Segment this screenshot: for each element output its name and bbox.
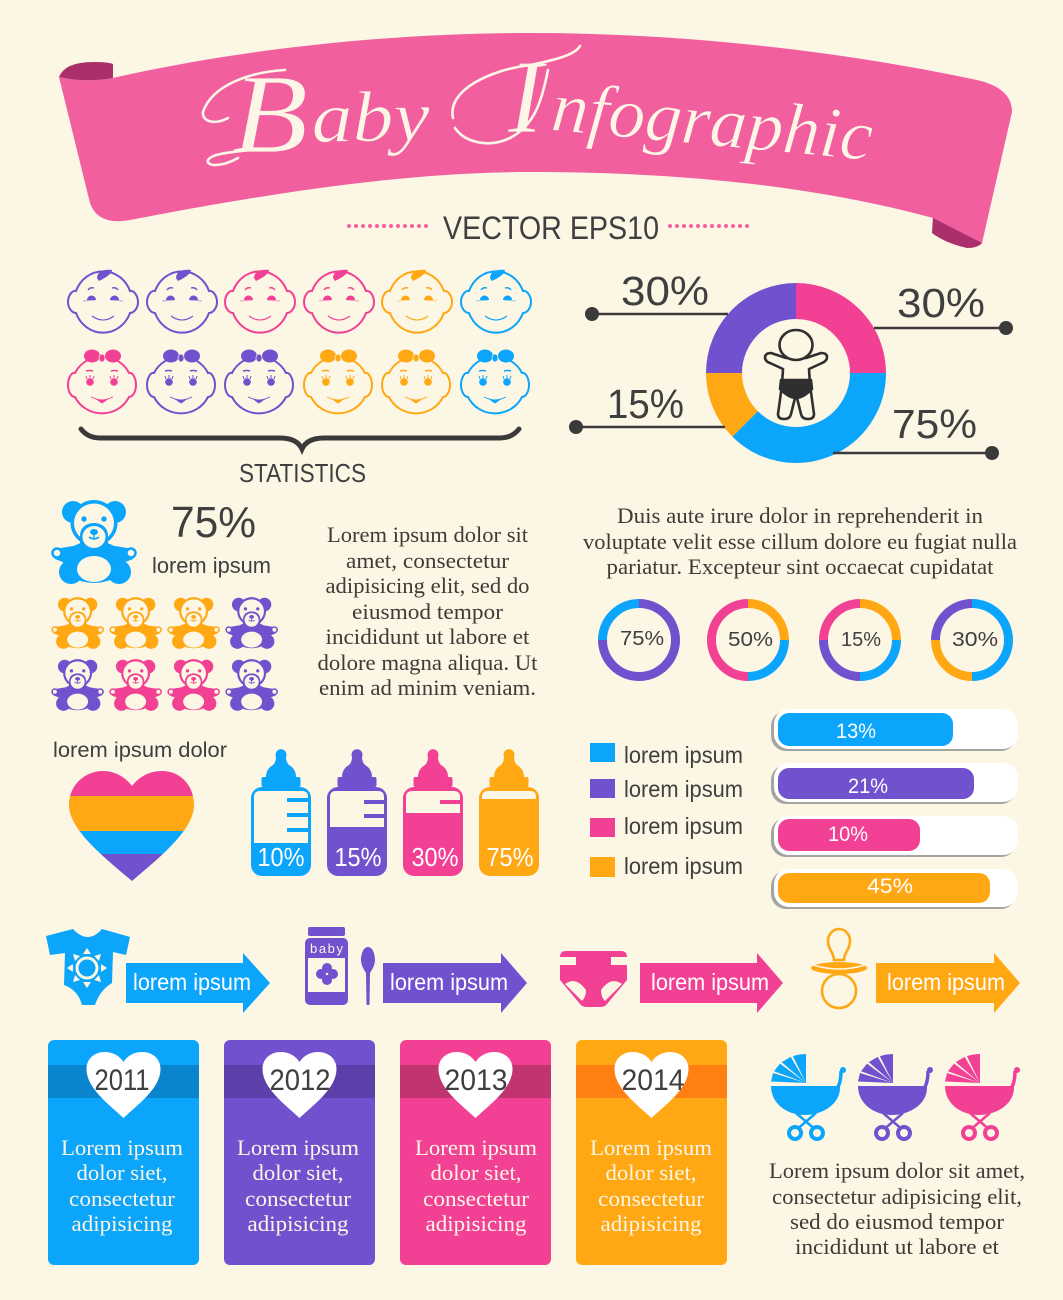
year card 2014: dolor siet, <box>606 1160 696 1185</box>
title ribbon <box>59 33 1012 248</box>
progress bar 10% <box>771 816 1018 857</box>
year card 2013: consectetur <box>423 1186 530 1211</box>
year card 2012 <box>224 1040 375 1265</box>
title text: nfographic <box>548 66 877 176</box>
progress bar 45% <box>771 869 1018 909</box>
progress bar 21% <box>771 763 1018 804</box>
legend: lorem ipsum <box>624 813 743 839</box>
arrow: orange <box>876 953 1020 1013</box>
year card 2012: 2012 <box>270 1064 330 1097</box>
year card 2012: Lorem ipsum <box>237 1135 359 1160</box>
ring chart 15% <box>824 604 896 676</box>
callout: 15% <box>569 381 725 434</box>
ring chart 50% <box>712 604 784 676</box>
year card 2013: Lorem ipsum <box>415 1135 537 1160</box>
ring chart 30% <box>936 604 1008 676</box>
year card 2011: adipisicing <box>72 1211 172 1236</box>
bottle 75% <box>479 749 539 876</box>
bottle 75%: 75% <box>486 842 534 872</box>
statistics label: STATISTICS <box>239 458 366 488</box>
year card 2014: consectetur <box>598 1186 705 1211</box>
callout: 15%: 15% <box>607 381 684 427</box>
icon: onesie <box>46 929 130 1005</box>
title text: I <box>507 38 548 155</box>
bottle 30%: 30% <box>412 842 458 872</box>
text block: stroller paragraph: consectetur adipisicing elit, <box>772 1184 1022 1209</box>
ring chart 75%: 75% <box>620 628 664 650</box>
year card 2014: 2014 <box>622 1064 684 1097</box>
legend: lorem ipsum <box>624 742 743 768</box>
text block: lorem paragraph: adipisicing elit, sed do <box>326 573 530 598</box>
arrow: pink <box>640 953 783 1013</box>
progress bar 45%: 45% <box>867 875 913 898</box>
bottle 15%: 15% <box>334 842 382 872</box>
year card 2011: consectetur <box>69 1186 176 1211</box>
bottle 10% <box>251 749 311 876</box>
arrow: pink: lorem ipsum <box>651 969 769 995</box>
legend: lorem ipsum <box>624 776 743 802</box>
subtitle: VECTOR EPS10 <box>443 210 659 246</box>
year card 2013: adipisicing <box>426 1211 526 1236</box>
arrow: blue <box>126 953 270 1013</box>
year card 2014: adipisicing <box>600 1211 702 1236</box>
icon: diaper <box>560 951 627 1007</box>
text block: duis paragraph <box>583 503 1017 579</box>
year card 2011 <box>48 1040 199 1265</box>
callout: 30% left <box>585 268 728 321</box>
progress bar 10%: 10% <box>828 823 868 846</box>
year card 2013 <box>400 1040 551 1265</box>
legend: lorem ipsum <box>624 853 743 879</box>
bear stat 75%: 75% <box>171 498 256 547</box>
text block: lorem paragraph: enim ad minim veniam. <box>319 675 536 700</box>
ring chart 50%: 50% <box>728 629 773 651</box>
heart chart <box>69 771 194 881</box>
heart chart heading: lorem ipsum dolor <box>53 738 227 762</box>
statistics brace <box>81 429 519 449</box>
icon: baby food jar <box>305 927 348 1005</box>
year card 2011: Lorem ipsum <box>61 1135 183 1160</box>
icon: baby in diaper <box>765 330 827 419</box>
arrow: purple <box>383 953 527 1013</box>
title text <box>203 38 877 177</box>
ring chart 75% <box>602 604 676 676</box>
text block: lorem paragraph: amet, consectetur <box>346 548 510 573</box>
arrow: purple: lorem ipsum <box>390 969 508 995</box>
title text: aby <box>311 76 430 158</box>
icon: baby food jar: baby <box>310 941 344 956</box>
icon: spoon <box>361 947 375 1005</box>
bear stat label: lorem ipsum <box>152 553 271 578</box>
arrow: orange: lorem ipsum <box>887 969 1005 995</box>
legend <box>590 742 743 879</box>
donut chart with baby <box>724 301 868 445</box>
callout: 75%: 75% <box>892 401 977 447</box>
text block: lorem paragraph: incididunt ut labore et <box>326 624 530 649</box>
year card 2014: Lorem ipsum <box>590 1135 712 1160</box>
text block: stroller paragraph: sed do eiusmod tempor <box>790 1209 1005 1234</box>
year card 2012: adipisicing <box>248 1211 348 1236</box>
callout: 30% right: 30% <box>897 280 985 326</box>
ring chart 15%: 15% <box>841 629 881 651</box>
year card 2012: dolor siet, <box>252 1160 344 1185</box>
text block: duis paragraph: voluptate velit esse cillum dolore eu fugiat nulla <box>583 529 1017 554</box>
bottle 15% <box>327 749 387 876</box>
year card 2012: consectetur <box>245 1186 352 1211</box>
icon: pacifier <box>811 929 867 1008</box>
baby girl faces <box>68 350 529 413</box>
text block: lorem paragraph <box>318 522 538 700</box>
text block: duis paragraph: pariatur. Excepteur sint occaecat cupidatat <box>606 554 994 579</box>
year card 2011: 2011 <box>94 1064 150 1097</box>
text block: stroller paragraph: incididunt ut labore et <box>795 1234 999 1259</box>
bottle 30% <box>403 749 463 876</box>
year card 2014 <box>576 1040 727 1265</box>
text block: stroller paragraph: Lorem ipsum dolor sit amet, <box>769 1158 1025 1183</box>
text block: lorem paragraph: eiusmod tempor <box>352 599 504 624</box>
icon: large teddy bear <box>52 500 136 584</box>
text block: stroller paragraph <box>769 1158 1025 1259</box>
bottle 10%: 10% <box>258 842 304 872</box>
text block: lorem paragraph: dolore magna aliqua. Ut <box>318 650 538 675</box>
year card 2013: 2013 <box>444 1064 508 1097</box>
ring chart 30%: 30% <box>952 629 998 651</box>
text block: lorem paragraph: Lorem ipsum dolor sit <box>327 522 528 547</box>
strollers <box>771 1054 1020 1139</box>
progress bar 13%: 13% <box>836 720 876 743</box>
callout: 75% <box>833 401 999 460</box>
year card 2013: dolor siet, <box>430 1160 522 1185</box>
year card 2011: dolor siet, <box>76 1160 168 1185</box>
arrow: blue: lorem ipsum <box>133 969 251 995</box>
progress bar 21%: 21% <box>848 775 888 798</box>
progress bar 13% <box>771 709 1018 751</box>
callout: 30% left: 30% <box>621 268 709 314</box>
title text: B <box>232 53 308 177</box>
small teddy bears <box>52 597 277 711</box>
callout: 30% right <box>874 280 1013 335</box>
text block: duis paragraph: Duis aute irure dolor in reprehenderit in <box>617 503 983 528</box>
baby boy faces <box>68 270 531 333</box>
